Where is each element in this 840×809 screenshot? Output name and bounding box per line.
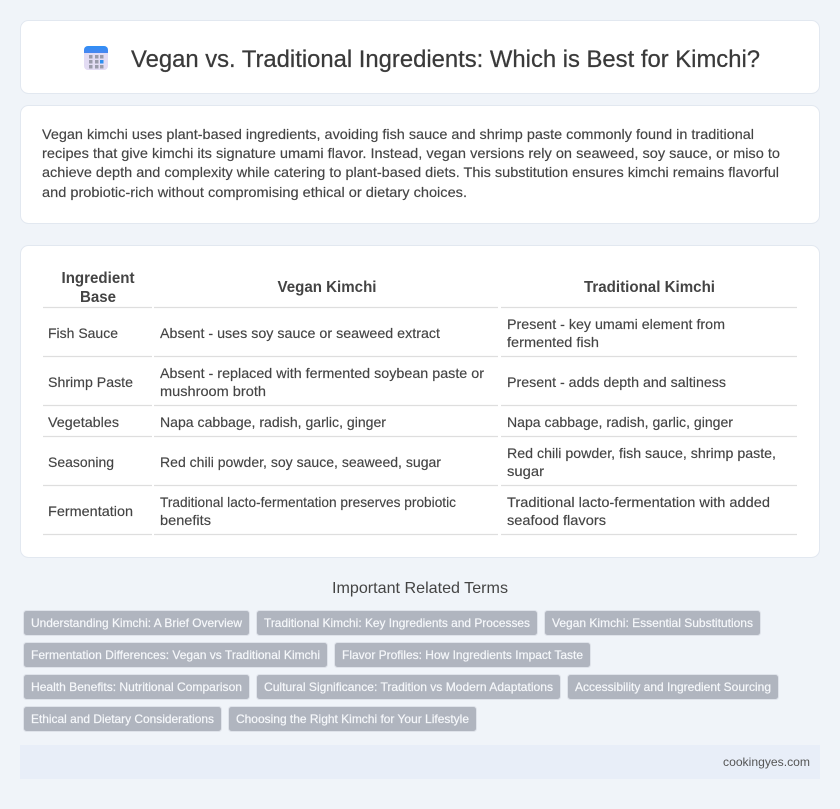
table header: Ingredient — [62, 270, 134, 287]
tag: Accessibility and Ingredient Sourcing — [575, 680, 771, 694]
footer bar — [20, 745, 820, 779]
intro text: achieve depth and complexity while catering to plant-based diets. This substitution ensures kimchi remains flavorful — [42, 164, 779, 180]
title: Vegan vs. Traditional Ingredients: Which is Best for Kimchi? — [131, 46, 760, 73]
tag: Cultural Significance: Tradition vs Modern Adaptations — [264, 680, 553, 694]
tag — [24, 610, 250, 636]
row: fermentation: benefits — [160, 512, 211, 528]
tag: Understanding Kimchi: A Brief Overview — [31, 616, 242, 630]
row: seasoning: Red chili powder, soy sauce, seaweed, sugar — [160, 454, 441, 470]
row: shrimp paste: Absent - replaced with fermented soybean paste or — [160, 365, 484, 381]
row: seasoning: Seasoning — [48, 454, 114, 470]
tag: Health Benefits: Nutritional Comparison — [31, 680, 242, 694]
tag: Choosing the Right Kimchi for Your Lifestyle — [236, 712, 469, 726]
tag: Traditional Kimchi: Key Ingredients and Processes — [264, 616, 530, 630]
row: fish sauce: fermented fish — [507, 334, 599, 350]
panel: comparison table — [20, 246, 820, 558]
tag — [256, 610, 538, 636]
row: shrimp paste: mushroom broth — [160, 383, 266, 399]
row: fish sauce: Present - key umami element from — [507, 316, 725, 332]
table header — [62, 270, 715, 306]
row: fermentation: Traditional lacto-fermentation with added — [507, 494, 770, 510]
row: fermentation: seafood flavors — [507, 512, 606, 528]
intro text: recipes that give kimchi its signature umami flavor. Instead, vegan versions rely on seaweed, soy sauce, or miso to — [42, 145, 780, 161]
tag: Fermentation Differences: Vegan vs Traditional Kimchi — [31, 648, 320, 662]
intro text — [42, 126, 780, 200]
tag — [544, 610, 760, 636]
footer source: cookingyes.com — [723, 755, 810, 769]
tag: Flavor Profiles: How Ingredients Impact Taste — [342, 648, 583, 662]
tag: Ethical and Dietary Considerations — [31, 712, 214, 726]
table header: Vegan Kimchi — [278, 279, 376, 296]
tag — [256, 674, 560, 700]
tag — [228, 706, 476, 732]
row: fermentation: Fermentation — [48, 503, 133, 519]
row: fish sauce — [48, 316, 725, 350]
row: shrimp paste: Shrimp Paste — [48, 374, 133, 390]
tag — [334, 642, 590, 668]
header panel — [20, 20, 820, 94]
row: seasoning — [48, 445, 776, 479]
heading: important related terms: Important Related Terms — [332, 580, 508, 597]
intro text: Vegan kimchi uses plant-based ingredients, avoiding fish sauce and shrimp paste commonly found in traditional — [42, 126, 754, 142]
row: vegetables: Vegetables — [48, 414, 119, 430]
row: vegetables: Napa cabbage, radish, garlic, ginger — [160, 414, 386, 430]
row: fish sauce: Fish Sauce — [48, 325, 118, 341]
panel: introduction — [20, 106, 820, 224]
tag — [24, 674, 250, 700]
table header: Base — [80, 289, 116, 306]
intro text: and probiotic-rich without compromising ethical or dietary choices. — [42, 184, 467, 200]
tag — [568, 674, 778, 700]
tag — [24, 642, 328, 668]
row: seasoning: sugar — [507, 463, 544, 479]
icon: calendar — [84, 46, 108, 70]
row: fermentation: Traditional lacto-fermentation preserves probiotic — [160, 494, 456, 510]
tag — [24, 706, 222, 732]
row: vegetables: Napa cabbage, radish, garlic, ginger — [507, 414, 733, 430]
row: vegetables — [48, 414, 733, 430]
row: shrimp paste — [48, 365, 726, 399]
tag: Vegan Kimchi: Essential Substitutions — [552, 616, 753, 630]
row: fish sauce: Absent - uses soy sauce or seaweed extract — [160, 325, 440, 341]
row: shrimp paste: Present - adds depth and saltiness — [507, 374, 726, 390]
tags: related terms — [24, 610, 778, 732]
table header: Traditional Kimchi — [584, 279, 715, 296]
row: seasoning: Red chili powder, fish sauce, shrimp paste, — [507, 445, 776, 461]
row: fermentation — [48, 494, 770, 528]
